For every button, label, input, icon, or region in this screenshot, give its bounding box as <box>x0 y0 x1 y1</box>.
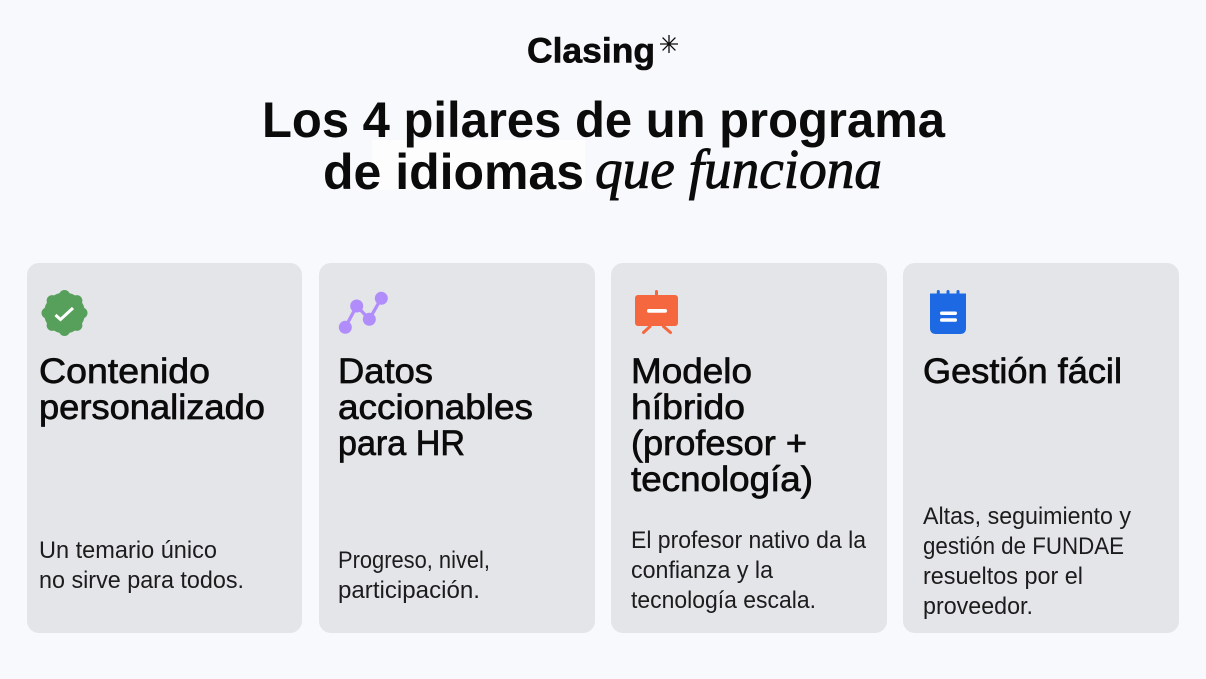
icon: purple line chart <box>339 292 388 334</box>
panel: modelo híbrido <box>611 263 887 633</box>
description <box>39 537 244 594</box>
description: tecnología escala. <box>631 587 816 614</box>
title: Los 4 pilares de un programa <box>262 92 946 148</box>
title: que funciona <box>595 139 882 201</box>
heading: Contenido <box>39 352 210 391</box>
panel: contenido personalizado <box>27 263 302 633</box>
description <box>631 527 867 614</box>
title: de idiomas <box>323 144 584 200</box>
panel: gestión fácil <box>903 263 1179 633</box>
heading: (profesor + <box>631 424 807 463</box>
icon: green check badge <box>42 290 88 336</box>
icon: blue notepad <box>930 292 966 334</box>
description: participación. <box>338 577 480 604</box>
heading: híbrido <box>631 388 745 427</box>
heading: para HR <box>338 424 465 463</box>
logo: Clasing: Clasing <box>527 32 655 70</box>
description: proveedor. <box>923 593 1033 620</box>
description: El profesor nativo da la <box>631 527 867 554</box>
heading: personalizado <box>39 388 265 427</box>
description <box>923 503 1131 620</box>
heading: tecnología) <box>631 460 813 499</box>
description: Un temario único <box>39 537 217 564</box>
title <box>262 92 946 201</box>
heading: Modelo <box>631 352 752 391</box>
description: Altas, seguimiento y <box>923 503 1131 530</box>
description: Progreso, nivel, <box>338 547 490 574</box>
description: resueltos por el <box>923 563 1083 590</box>
icon: orange presentation board <box>635 292 678 332</box>
heading: accionables <box>338 388 533 427</box>
description <box>338 547 490 604</box>
description: confianza y la <box>631 557 774 584</box>
heading <box>338 352 533 463</box>
panel: datos accionables <box>319 263 595 633</box>
heading: Gestión fácil <box>923 352 1122 391</box>
heading <box>631 352 813 499</box>
description: no sirve para todos. <box>39 567 244 594</box>
heading: Datos <box>338 352 433 391</box>
description: gestión de FUNDAE <box>923 533 1124 560</box>
heading <box>39 352 265 427</box>
